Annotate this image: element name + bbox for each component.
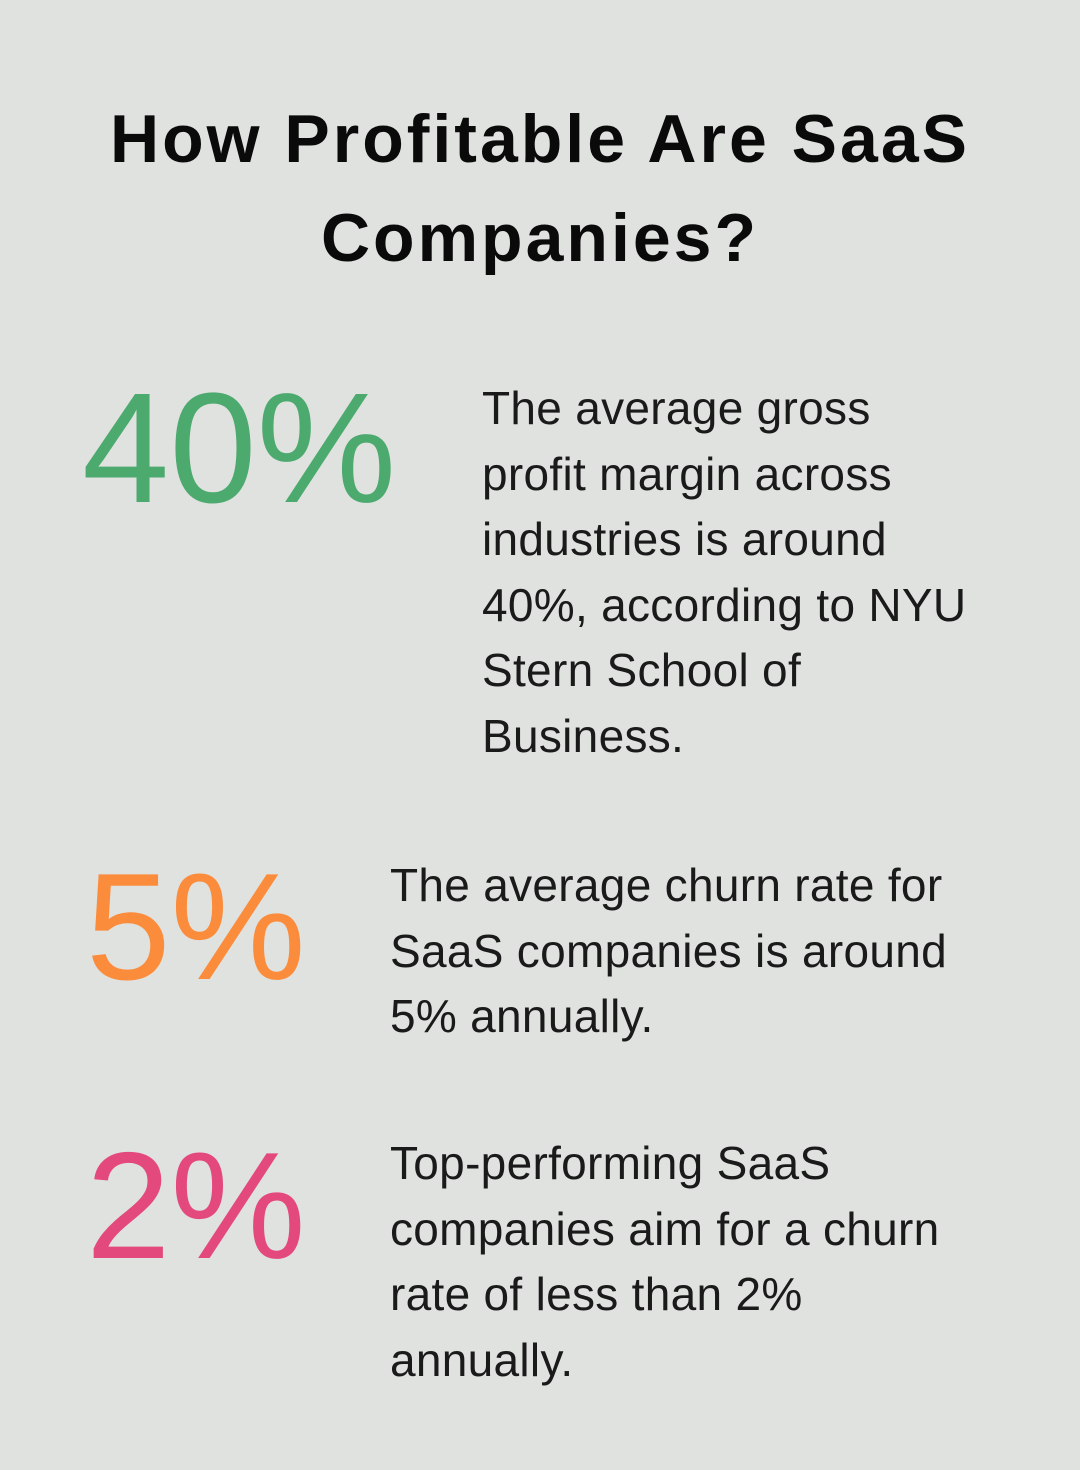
text block: gross margin: industries is around [482,513,887,565]
text block: top performers [390,1137,940,1386]
text block: top performers: companies aim for a churn [390,1202,940,1254]
text block: top performers: Top-performing SaaS [390,1137,830,1189]
text block: gross margin: Stern School of [482,644,801,696]
text block: churn [390,859,947,1042]
text block: gross margin: 40%, according to NYU [482,578,966,630]
title [110,101,970,276]
text block: top performers: rate of less than 2% [390,1268,803,1320]
text block: gross margin: Business. [482,710,684,762]
text block: churn: 5% annually. [390,990,654,1042]
text block: gross margin: profit margin across [482,448,892,500]
title: Companies? [321,200,759,276]
stat: 2%: 2% [86,1121,306,1291]
title: How Profitable Are SaaS [110,101,970,177]
stat: 40%: 40% [82,361,396,536]
text block: gross margin: The average gross [482,382,871,434]
text block: top performers: annually. [390,1334,573,1386]
text block: churn: The average churn rate for [390,859,942,911]
text block: churn: SaaS companies is around [390,924,947,976]
stat: 5%: 5% [86,842,306,1012]
text block: gross margin [482,382,966,762]
